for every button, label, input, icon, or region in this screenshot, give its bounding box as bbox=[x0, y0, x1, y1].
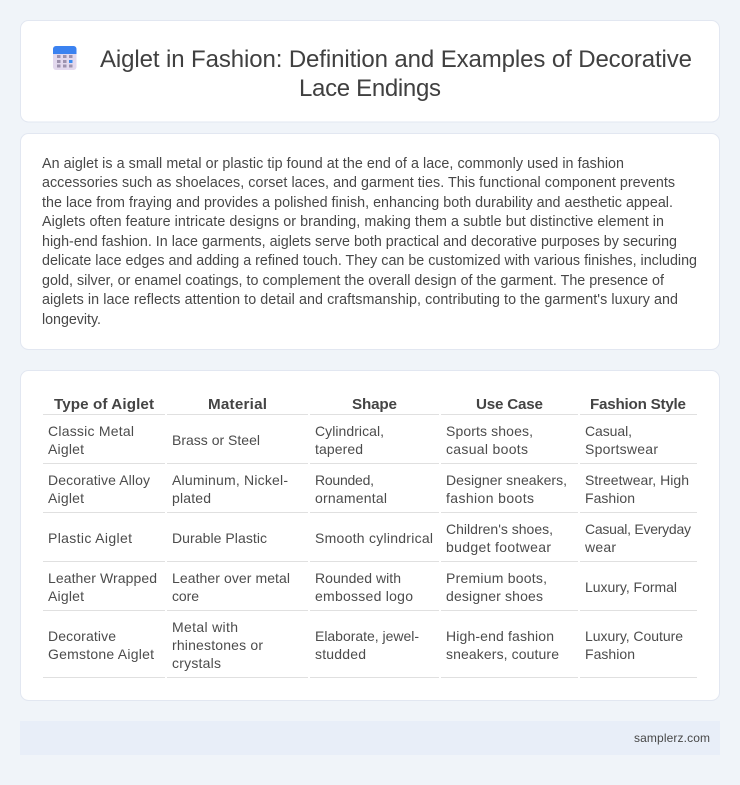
table row: Decorative Alloy Aiglet: Streetwear, High bbox=[585, 472, 689, 488]
text block: description: accessories such as shoelaces, corset laces, and garment ties. This functional component prevents bbox=[42, 175, 675, 191]
table header bbox=[54, 396, 686, 413]
table row: Decorative Gemstone Aiglet: Decorative bbox=[48, 628, 116, 644]
table row: Decorative Gemstone Aiglet: Elaborate, jewel- bbox=[315, 628, 419, 644]
table row: Decorative Gemstone Aiglet: Fashion bbox=[585, 646, 635, 662]
table row: Leather Wrapped Aiglet bbox=[48, 570, 677, 604]
table row: Leather Wrapped Aiglet: Leather Wrapped bbox=[48, 570, 157, 586]
table row: Plastic Aiglet bbox=[48, 521, 691, 555]
table row: Leather Wrapped Aiglet: Rounded with bbox=[315, 570, 401, 586]
table row: Plastic Aiglet: Plastic Aiglet bbox=[48, 530, 132, 546]
table row: Classic Metal Aiglet: Sports shoes, bbox=[446, 423, 533, 439]
table row: Classic Metal Aiglet: tapered bbox=[315, 441, 363, 457]
table row: Classic Metal Aiglet: Cylindrical, bbox=[315, 423, 384, 439]
table row: Plastic Aiglet: Durable Plastic bbox=[172, 530, 267, 546]
table row: Decorative Alloy Aiglet: Rounded, bbox=[315, 472, 374, 488]
table header: Use Case bbox=[476, 396, 543, 413]
table row: Decorative Alloy Aiglet: plated bbox=[172, 490, 211, 506]
table row: Classic Metal Aiglet: Casual, bbox=[585, 423, 632, 439]
panel: header bbox=[20, 20, 720, 122]
table row: Decorative Alloy Aiglet: Fashion bbox=[585, 490, 635, 506]
title: Lace Endings bbox=[299, 75, 441, 102]
table row: Decorative Alloy Aiglet: fashion boots bbox=[446, 490, 534, 506]
table row: Decorative Gemstone Aiglet: rhinestones or bbox=[172, 637, 263, 653]
footer bbox=[20, 721, 720, 755]
table row: Leather Wrapped Aiglet: Aiglet bbox=[48, 588, 84, 604]
table row: Leather Wrapped Aiglet: Leather over metal bbox=[172, 570, 290, 586]
table row: Decorative Gemstone Aiglet: sneakers, couture bbox=[446, 646, 559, 662]
table row: Classic Metal Aiglet: Aiglet bbox=[48, 441, 84, 457]
table row: Classic Metal Aiglet: Sportswear bbox=[585, 441, 658, 457]
table row: Decorative Gemstone Aiglet: Metal with bbox=[172, 619, 238, 635]
table row: Plastic Aiglet: Children's shoes, bbox=[446, 521, 553, 537]
text block: description: Aiglets often feature intricate designs or branding, making them a subtle but distinctive element in bbox=[42, 214, 664, 230]
table header: Type of Aiglet bbox=[54, 396, 154, 413]
table row: Plastic Aiglet: Smooth cylindrical bbox=[315, 530, 433, 546]
icon: calendar bbox=[53, 46, 76, 70]
table row: Decorative Alloy Aiglet: Decorative Alloy bbox=[48, 472, 150, 488]
text block: description bbox=[42, 156, 697, 328]
table row: Classic Metal Aiglet: Classic Metal bbox=[48, 423, 134, 439]
footer: samplerz.com bbox=[634, 731, 710, 745]
table header: Fashion Style bbox=[590, 396, 686, 413]
table row: Leather Wrapped Aiglet: designer shoes bbox=[446, 588, 543, 604]
table row: Decorative Gemstone Aiglet: crystals bbox=[172, 655, 221, 671]
table row: Classic Metal Aiglet bbox=[48, 423, 658, 457]
table row: Leather Wrapped Aiglet: core bbox=[172, 588, 199, 604]
table row: Plastic Aiglet: Casual, Everyday bbox=[585, 521, 691, 537]
table row: Decorative Alloy Aiglet: Aiglet bbox=[48, 490, 84, 506]
table row: Leather Wrapped Aiglet: embossed logo bbox=[315, 588, 413, 604]
table header: Shape bbox=[352, 396, 397, 413]
table row: Plastic Aiglet: wear bbox=[584, 539, 616, 555]
table row: Decorative Alloy Aiglet bbox=[48, 472, 689, 506]
table row: Decorative Gemstone Aiglet: Luxury, Couture bbox=[585, 628, 683, 644]
text block: description: aiglets in lace reflects attention to detail and craftsmanship, contributing to the garment's luxury and bbox=[42, 292, 678, 308]
table row: Decorative Alloy Aiglet: Designer sneakers, bbox=[446, 472, 567, 488]
title bbox=[100, 46, 692, 102]
table row: Decorative Alloy Aiglet: Aluminum, Nickel- bbox=[172, 472, 288, 488]
title: Aiglet in Fashion: Definition and Examples of Decorative bbox=[100, 46, 692, 73]
table row: Decorative Alloy Aiglet: ornamental bbox=[315, 490, 387, 506]
table row: Decorative Gemstone Aiglet: High-end fashion bbox=[446, 628, 554, 644]
text block: description: An aiglet is a small metal or plastic tip found at the end of a lace, commonly used in fashion bbox=[42, 156, 624, 172]
panel: table bbox=[20, 370, 720, 700]
table row: Decorative Gemstone Aiglet bbox=[48, 619, 683, 671]
text block: description: gold, silver, or enamel coatings, to complement the overall design of the garment. The presence of bbox=[42, 273, 664, 289]
table row: Classic Metal Aiglet: Brass or Steel bbox=[172, 432, 260, 448]
table row: Decorative Gemstone Aiglet: Gemstone Aiglet bbox=[48, 646, 154, 662]
table row: Plastic Aiglet: budget footwear bbox=[446, 539, 551, 555]
table row: Decorative Gemstone Aiglet: studded bbox=[315, 646, 366, 662]
text block: description: the lace from fraying and provides a polished finish, enhancing both durability and aesthetic appeal. bbox=[42, 195, 673, 211]
text block: description: high-end fashion. In lace garments, aiglets serve both practical and decorative purposes by securing bbox=[42, 234, 677, 250]
panel: description bbox=[20, 134, 720, 350]
text block: description: longevity. bbox=[42, 312, 101, 328]
table row: Leather Wrapped Aiglet: Premium boots, bbox=[446, 570, 547, 586]
table header: Material bbox=[208, 396, 267, 413]
table row: Classic Metal Aiglet: casual boots bbox=[446, 441, 528, 457]
text block: description: delicate lace edges and adding a refined touch. They can be customized with various finishes, including bbox=[42, 253, 697, 269]
table row: Leather Wrapped Aiglet: Luxury, Formal bbox=[585, 579, 677, 595]
